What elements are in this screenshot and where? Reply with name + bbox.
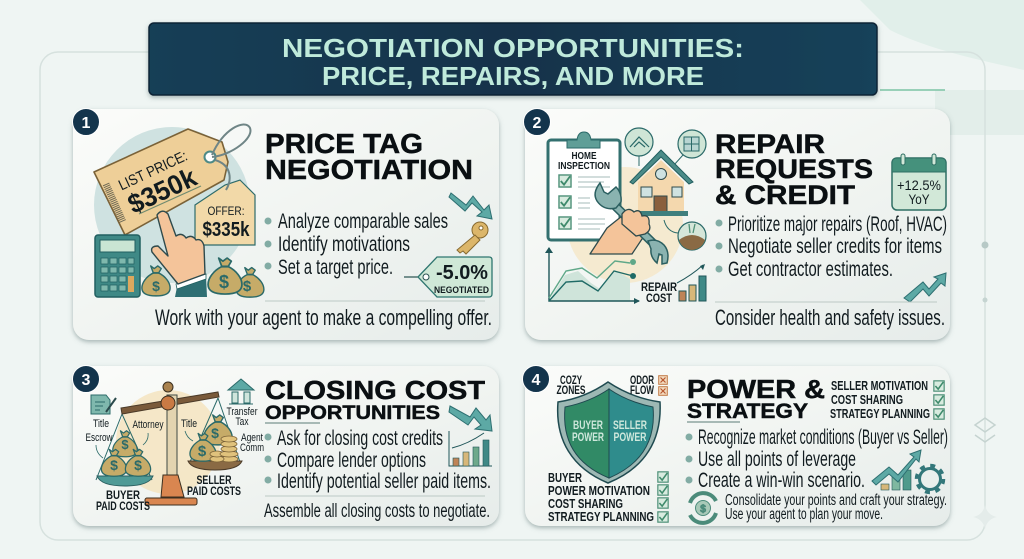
bullet list: Identify motivations (278, 233, 410, 256)
illustration: balance scale: SELLER (196, 473, 232, 487)
scale labels: Tax (236, 416, 249, 428)
bullet list: Analyze comparable sales (278, 210, 448, 233)
bullet list: Identify potential seller paid items. (277, 470, 491, 493)
icon: gear (916, 466, 944, 492)
closing note: Work with your agent to make a compelling offer. (155, 305, 492, 330)
panel 1: price tag negotiation (72, 108, 499, 340)
scale labels: Title (93, 418, 109, 430)
buyer checklist: POWER MOTIVATION (548, 483, 650, 498)
repair cost chart (641, 264, 706, 305)
bullet list (264, 210, 448, 279)
bullet list: Create a win-win scenario. (698, 469, 865, 492)
seller checklist: COST SHARING (831, 392, 903, 407)
panel 2: repair requests and credit (524, 108, 950, 340)
badge 2: 2 (533, 115, 542, 132)
illustration backdrop (567, 167, 683, 283)
repair cost chart: REPAIR (641, 282, 678, 294)
icon: shield: SELLER (613, 418, 647, 432)
money bags: $ (152, 278, 160, 294)
tag: -5.0% negotiated (404, 257, 492, 297)
heading: STRATEGY (687, 400, 808, 423)
heading: REPAIR (715, 129, 825, 159)
closing note: Use your agent to plan your move. (725, 506, 883, 523)
icon: wrench and hand (590, 183, 668, 264)
shield labels: COZY (560, 373, 582, 387)
heading (265, 375, 485, 424)
bullet list: Compare lender options (277, 449, 426, 472)
icon: down arrow (449, 193, 492, 219)
heading (265, 128, 473, 185)
calendar badge: YoY (908, 191, 930, 207)
left money bags: $ (121, 437, 129, 452)
icon: shield: POWER (572, 430, 604, 444)
bullet list: Set a target price. (278, 256, 393, 279)
calculator (95, 235, 140, 297)
left money bags (101, 431, 151, 476)
list price tag (94, 124, 250, 235)
left money bags: $ (110, 457, 118, 473)
seller checklist: SELLER MOTIVATION (831, 378, 928, 393)
clipboard (548, 132, 620, 240)
bullet list (264, 427, 491, 493)
beam and post (121, 382, 219, 505)
heading: OPPORTUNITIES (265, 403, 440, 424)
panel 3: closing cost opportunities (72, 366, 499, 526)
repair cost chart: COST (646, 293, 672, 305)
shield labels: ODOR (630, 373, 654, 387)
scale labels: Agent (241, 432, 263, 444)
icon: shield (558, 382, 660, 483)
offer tag: $335k (202, 219, 250, 241)
clipboard: HOME (572, 151, 597, 162)
icon: growth chart (872, 450, 921, 490)
line chart (545, 247, 640, 304)
closing note (725, 492, 947, 523)
heading: & CREDIT (715, 180, 856, 210)
icon: cycle: $ (700, 504, 706, 515)
icon: bank house (228, 379, 254, 404)
icon: soil bubble (664, 220, 706, 250)
pointing hand (152, 211, 207, 297)
icon: cycle (690, 493, 716, 523)
calendar badge (892, 154, 946, 210)
buyer checklist: COST SHARING (548, 496, 623, 511)
badge 1: 1 (82, 115, 91, 132)
heading: POWER & (687, 374, 825, 404)
icon: window bubble (674, 130, 706, 165)
tag: -5.0% negotiated: -5.0% (436, 262, 488, 284)
right money bags and coins: $ (211, 425, 219, 441)
scale labels: Title (181, 418, 197, 430)
icon: roof bubble (625, 128, 653, 166)
bullet list (716, 213, 947, 281)
bullet list: Get contractor estimates. (728, 258, 893, 281)
heading (687, 374, 825, 423)
badge 3 (72, 366, 100, 392)
scale labels: Comm (240, 442, 264, 454)
calendar badge: +12.5% (897, 177, 941, 193)
shield labels: FLOW (630, 383, 654, 397)
heading: REQUESTS (715, 154, 873, 184)
right pan (188, 461, 242, 470)
bullet list: Ask for closing cost credits (277, 427, 443, 450)
scale labels: Transfer (226, 406, 258, 418)
right money bags and coins (190, 415, 238, 462)
bullet list: Use all points of leverage (698, 448, 856, 471)
bullet list (686, 426, 948, 492)
offer tag: OFFER: (208, 204, 244, 218)
badge 4: 4 (532, 372, 541, 389)
scale labels: Attorney (132, 419, 164, 431)
clipboard: INSPECTION (558, 161, 610, 172)
icon: shield: BUYER (573, 418, 603, 432)
illustration: balance scale: PAID COSTS (187, 484, 241, 498)
list price tag: LIST PRICE: (116, 148, 190, 194)
bar chart (449, 431, 492, 466)
heading (715, 129, 873, 210)
seller checklist (830, 378, 944, 421)
shield labels (556, 373, 667, 397)
title banner: NEGOTIATION OPPORTUNITIES: (282, 33, 744, 63)
buyer checklist: STRATEGY PLANNING (548, 509, 654, 524)
money bags: $ (219, 272, 229, 292)
icon: document (91, 395, 116, 414)
illustration: balance scale: BUYER (106, 488, 140, 502)
buyer checklist (548, 470, 668, 524)
icon: house (630, 150, 693, 216)
scale labels: Escrow (86, 432, 113, 444)
icon: key (457, 222, 488, 254)
title banner: PRICE, REPAIRS, AND MORE (322, 61, 704, 91)
buyer checklist: BUYER (548, 470, 582, 485)
icon: up arrow (904, 273, 946, 302)
heading: NEGOTIATION (265, 154, 473, 185)
seller checklist: STRATEGY PLANNING (830, 406, 930, 421)
heading: CLOSING COST (265, 375, 485, 405)
badge 2 (524, 108, 550, 136)
illustration: balance scale (86, 382, 264, 513)
closing note: Assemble all closing costs to negotiate. (264, 501, 490, 522)
right money bags and coins: $ (198, 443, 207, 460)
left pan (97, 476, 153, 486)
panel 4: power and strategy (522, 366, 950, 526)
badge 3: 3 (82, 372, 91, 389)
title banner (149, 23, 877, 95)
icon: shield: POWER (614, 430, 647, 444)
shield labels: ZONES (556, 383, 586, 397)
money bags (142, 258, 264, 297)
left money bags: $ (134, 457, 142, 473)
badge 1 (72, 108, 100, 136)
illustration: price tags and hand (94, 124, 264, 297)
badge 4 (522, 366, 550, 392)
list price tag: $350k (123, 162, 202, 220)
money bags: $ (243, 278, 252, 295)
icon: down arrow (449, 406, 492, 431)
tag: -5.0% negotiated: NEGOTIATED (434, 285, 489, 296)
offer tag (195, 180, 255, 245)
heading: PRICE TAG (265, 128, 423, 159)
illustration: balance scale: PAID COSTS (96, 499, 150, 513)
bullet list: Negotiate seller credits for items (728, 235, 942, 258)
scale labels (86, 406, 264, 458)
